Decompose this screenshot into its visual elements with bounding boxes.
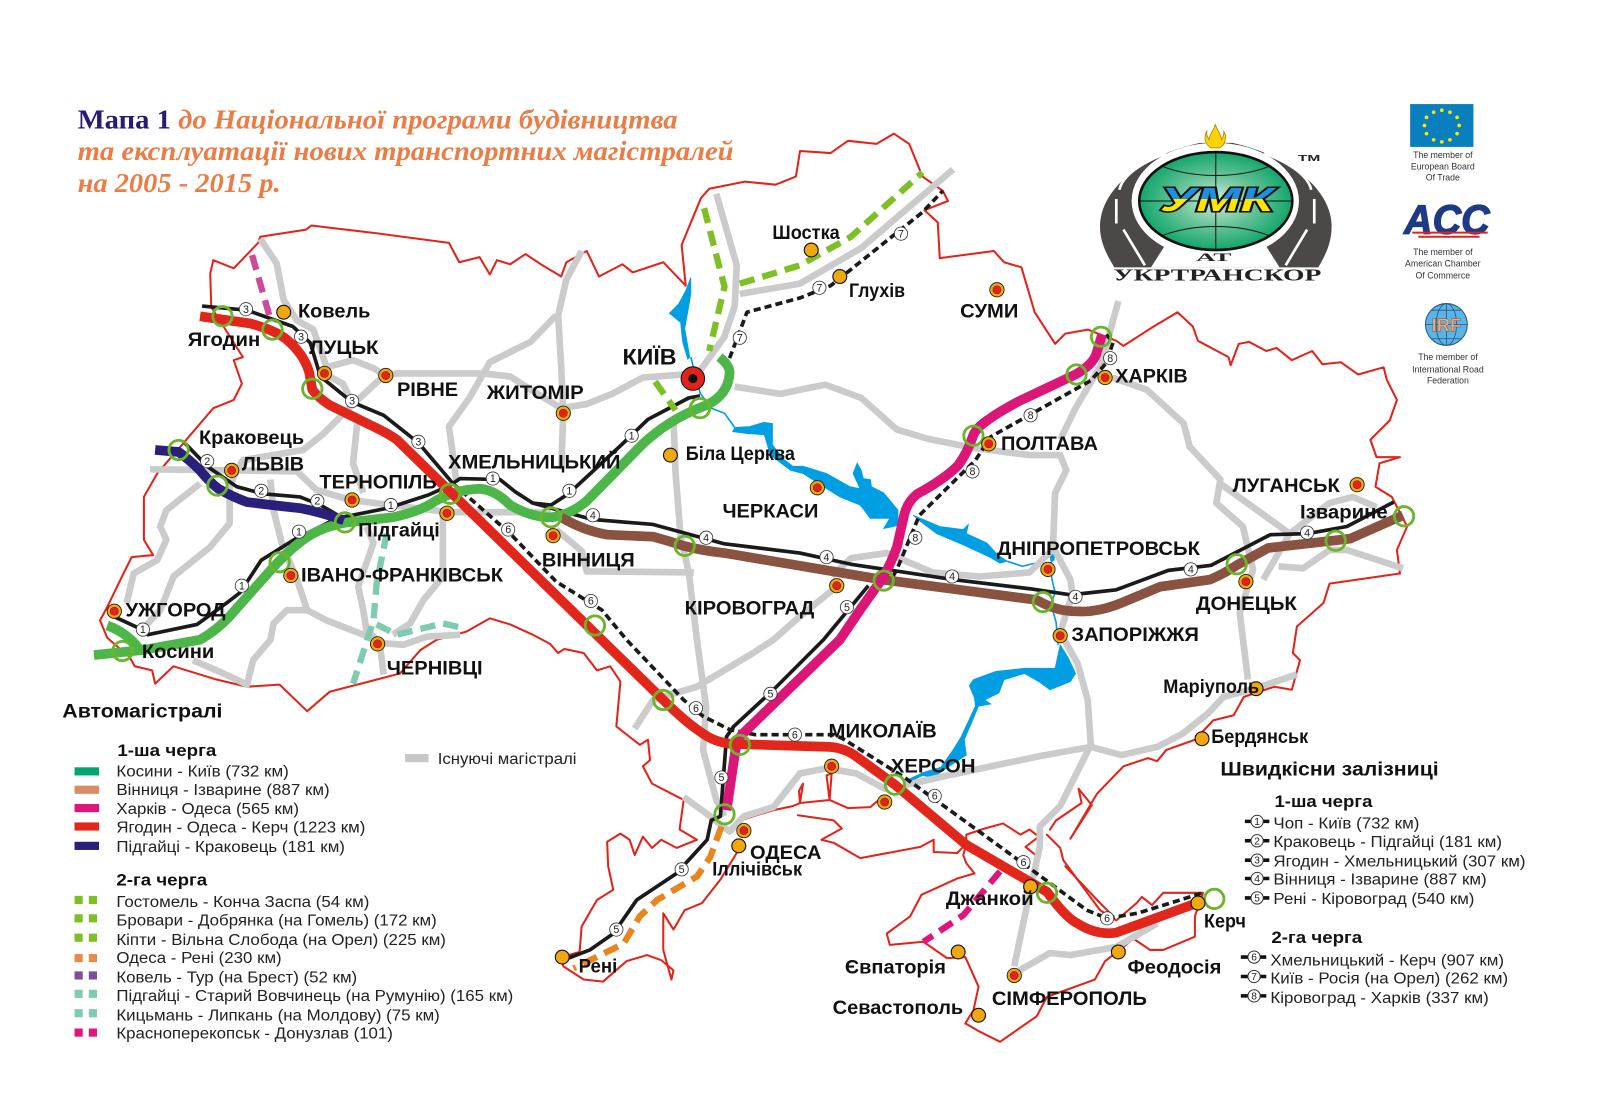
legend group: first stage motorways: 1-ша черга	[117, 741, 217, 760]
legend group: first stage motorways: Ягодин - Одеса - Керч (1223 км)	[116, 820, 365, 837]
logo AT: АТ	[1196, 252, 1233, 264]
city labels: Бердянськ	[1211, 726, 1308, 748]
legend: motorways	[62, 700, 577, 1043]
legend group: second stage railways: 6	[1251, 953, 1257, 964]
rail line number badges: 4	[949, 571, 955, 583]
town markers	[277, 243, 1263, 1022]
city labels: Біла Церква	[686, 443, 795, 465]
rail line number badges: 3	[415, 436, 421, 448]
legend group: second stage motorways: Кицьмань - Липкань (на Молдову) (75 км)	[116, 1007, 440, 1024]
city labels: КИЇВ	[622, 344, 677, 369]
city labels: Краковець	[199, 427, 304, 449]
city labels: СУМИ	[960, 300, 1018, 322]
first-stage highway: Kosyny - Kyiv	[94, 357, 730, 655]
EU flag badge	[1410, 104, 1475, 183]
rail line number badges: 2	[258, 485, 264, 497]
rail line number badges: 1	[629, 430, 635, 442]
logo letters: УМК	[1160, 182, 1277, 219]
city labels: Керч	[1204, 910, 1246, 932]
city labels: Підгайці	[358, 520, 440, 542]
city labels: ЗАПОРІЖЖЯ	[1071, 624, 1199, 646]
legend group: second stage motorways: Бровари - Добрянка (на Гомель) (172 км)	[116, 912, 437, 929]
legend group: first stage railways: Чоп - Київ (732 км)	[1273, 816, 1419, 833]
rail line number badges: 6	[792, 729, 798, 741]
EU flag badge: Of Trade	[1426, 173, 1460, 183]
city labels: Ягодин	[188, 329, 260, 351]
legend group: first stage railways	[1245, 792, 1525, 908]
logo globe	[1139, 152, 1292, 250]
city labels: Шостка	[772, 222, 840, 244]
rail line number badges: 6	[505, 524, 511, 536]
rail line number badges: 6	[1020, 857, 1026, 869]
rail line number badges: 5	[613, 924, 619, 936]
existing highways (grey)	[127, 169, 1403, 970]
rail line number badges: 1	[566, 485, 572, 497]
legend: existing motorways: Існуючі магістралі	[438, 751, 577, 768]
legend group: second stage railways: Кіровоград - Харків (337 км)	[1270, 990, 1489, 1007]
rail line number badges: 5	[844, 602, 850, 614]
EU flag badge: The member of	[1413, 150, 1473, 160]
first-stage highway: Kharkiv - Odesa	[727, 335, 1102, 810]
city labels: Глухів	[849, 280, 905, 302]
rail line number badges: 5	[679, 864, 685, 876]
city labels: Євпаторія	[845, 956, 946, 978]
city labels: ДОНЕЦЬК	[1196, 593, 1297, 615]
logo road dome	[1100, 143, 1332, 267]
city labels	[126, 222, 1388, 1019]
rail line number badges: 6	[588, 596, 594, 608]
city labels: ЖИТОМІР	[486, 382, 584, 404]
rail line number badges: 3	[298, 331, 304, 343]
legend group: second stage railways: Хмельницький - Керч (907 км)	[1270, 952, 1504, 969]
legend group: first stage motorways: Підгайці - Краковець (181 км)	[116, 839, 345, 856]
rail line number badges: 1	[140, 624, 146, 636]
rail line number badges: 1	[490, 473, 496, 485]
rail line number badges: 4	[824, 552, 830, 564]
city labels: Рені	[579, 955, 617, 977]
rail line number badges: 8	[1107, 353, 1113, 365]
IRF globe badge: Federation	[1427, 376, 1469, 386]
city labels: ТЕРНОПІЛЬ	[319, 472, 437, 494]
legend group: second stage railways	[1241, 928, 1508, 1007]
rail line number badges: 7	[737, 332, 743, 344]
legend heading: motorways: Автомагістралі	[62, 700, 222, 722]
city labels: Іллічівськ	[712, 858, 802, 880]
city labels: ДНІПРОПЕТРОВСЬК	[997, 538, 1200, 560]
city labels: Феодосія	[1128, 956, 1221, 978]
ACC badge: The member of	[1413, 247, 1473, 257]
city labels: ХАРКІВ	[1115, 366, 1188, 388]
rail line number badges: 2	[314, 496, 320, 508]
ACC badge: Of Commerce	[1416, 271, 1470, 281]
rail line number badges: 4	[1188, 564, 1194, 576]
city labels: ЛУГАНСЬК	[1233, 475, 1340, 497]
legend group: second stage motorways: Гостомель - Конча Заспа (54 км)	[116, 894, 369, 911]
ACC badge: ACC	[1403, 197, 1490, 243]
rail line number badges: 1	[239, 580, 245, 592]
first-stage highway: Vinnytsia - Izvaryne	[561, 515, 1403, 612]
first-stage highway: Pidhaitsi - Krakovets	[155, 450, 344, 520]
city labels: ЛЬВІВ	[242, 453, 304, 475]
city labels: Ковель	[298, 300, 371, 322]
city labels: ЧЕРНІВЦІ	[387, 657, 483, 679]
city labels: РІВНЕ	[397, 379, 458, 401]
legend group: first stage railways: Краковець - Підгайці (181 км)	[1273, 834, 1502, 851]
rail line number badges: 1	[388, 500, 394, 512]
city labels: Джанкой	[946, 888, 1034, 910]
city labels: ЛУЦЬК	[309, 337, 379, 359]
legend heading: high-speed railways: Швидкісни залізниці	[1220, 758, 1439, 780]
Kyiv capital marker	[681, 367, 705, 390]
rail line number badges: 4	[703, 532, 709, 544]
city labels: ХМЕЛЬНИЦЬКИЙ	[448, 449, 620, 473]
high-speed rail lines (dashed)	[453, 191, 1203, 918]
interchange rings	[113, 307, 1414, 909]
legend group: second stage motorways: Підгайці - Старий Вовчинець (на Румунію) (165 км)	[116, 988, 513, 1005]
logo trademark: TM	[1298, 154, 1321, 163]
legend group: second stage railways: 2-га черга	[1271, 928, 1363, 947]
legend group: second stage motorways: Одеса - Рені (230 км)	[116, 950, 282, 967]
rail line number badges: 1	[296, 526, 302, 538]
rail line number badges: 2	[204, 456, 210, 468]
legend group: second stage railways: Київ - Росія (на Орел) (262 км)	[1270, 971, 1508, 988]
second-stage highways (dashed)	[252, 172, 1000, 968]
rail line number badges: 7	[898, 228, 904, 240]
rail line number badges: 4	[1073, 592, 1079, 604]
oblast-centre markers	[107, 283, 1364, 983]
rail line number badges: 4	[590, 510, 596, 522]
legend: high-speed railways	[1220, 758, 1525, 1007]
legend group: second stage railways: 7	[1251, 972, 1257, 983]
city labels: Маріуполь	[1163, 676, 1259, 698]
ACC badge	[1403, 197, 1490, 281]
city labels: УЖГОРОД	[126, 599, 226, 621]
rail line number badges: 7	[816, 282, 822, 294]
IRF globe badge: IRF	[1432, 315, 1461, 336]
legend group: second stage motorways: 2-га черга	[116, 871, 208, 890]
rail line number badges: 5	[718, 772, 724, 784]
rail line number badges: 8	[1028, 410, 1034, 422]
legend group: first stage railways: Рені - Кіровоград (540 км)	[1273, 891, 1474, 908]
legend group: first stage railways: 3	[1254, 856, 1260, 867]
EU flag badge: European Board	[1411, 161, 1475, 171]
rail line number badges: 8	[969, 466, 975, 478]
legend group: second stage motorways: Ковель - Тур (на Брест) (52 км)	[116, 970, 357, 987]
city labels: ІВАНО-ФРАНКІВСЬК	[301, 565, 503, 587]
rail line number badges: 3	[349, 396, 355, 408]
city labels: ОДЕСА	[750, 842, 821, 864]
city labels: СІМФЕРОПОЛЬ	[992, 988, 1147, 1010]
logo company name: УКРТРАНСКОР	[1113, 266, 1322, 285]
city labels: ПОЛТАВА	[1001, 433, 1098, 455]
rivers and reservoirs	[669, 278, 1075, 784]
rail line number badges: 3	[243, 304, 249, 316]
logo flame	[1205, 124, 1226, 148]
logo: UMK Ukrtranskor	[1100, 124, 1332, 285]
legend group: second stage motorways: Кіпти - Вільна Слобода (на Орел) (225 км)	[116, 932, 446, 949]
city labels: Севастополь	[833, 997, 963, 1019]
legend group: first stage railways: Ягодин - Хмельницький (307 км)	[1273, 853, 1525, 870]
legend group: first stage railways: Вінниця - Ізварине (887 км)	[1273, 872, 1487, 889]
rail line number badges: 6	[693, 703, 699, 715]
rail line number badges: 5	[767, 689, 773, 701]
legend group: first stage railways: 5	[1254, 893, 1260, 904]
legend group: first stage motorways: Вінниця - Ізварине (887 км)	[116, 782, 330, 799]
rail line number badges: 8	[912, 532, 918, 544]
legend group: first stage railways: 2	[1254, 836, 1260, 847]
legend group: first stage motorways	[75, 741, 365, 856]
rail line number badges: 4	[1304, 527, 1310, 539]
rail line number badges: 6	[932, 791, 938, 803]
city labels: ВІННИЦЯ	[542, 549, 635, 571]
legend group: second stage motorways	[75, 871, 513, 1043]
city labels: Ізварине	[1300, 501, 1388, 523]
legend group: first stage railways: 4	[1254, 874, 1260, 885]
first-stage highway: Yahodyn - Odesa - Kerch	[200, 316, 1197, 933]
legend group: second stage railways: 8	[1251, 991, 1257, 1002]
city labels: Косини	[142, 641, 214, 663]
city labels: ХЕРСОН	[891, 755, 976, 777]
IRF globe badge: The member of	[1418, 352, 1478, 362]
legend group: first stage motorways: Косини - Київ (732 км)	[116, 763, 289, 780]
city labels: МИКОЛАЇВ	[829, 720, 937, 743]
IRF globe badge: International Road	[1412, 364, 1484, 374]
legend group: first stage railways: 1	[1254, 817, 1260, 828]
city labels: ЧЕРКАСИ	[722, 500, 818, 522]
legend group: first stage motorways: Харків - Одеса (565 км)	[116, 801, 299, 818]
title: та експлуатації нових транспортних магістралей	[78, 136, 734, 166]
city labels: КІРОВОГРАД	[685, 597, 814, 619]
title	[78, 105, 734, 198]
legend group: first stage railways: 1-ша черга	[1274, 792, 1373, 811]
IRF globe badge	[1412, 304, 1484, 386]
border of Ukraine	[100, 134, 1407, 1042]
ACC badge: American Chamber	[1405, 258, 1481, 268]
title: Мапа 1 до Національної програми будівництва	[78, 105, 678, 135]
legend group: second stage motorways: Красноперекопськ - Донузлав (101)	[116, 1026, 393, 1043]
rail line number badges: 6	[1104, 913, 1110, 925]
rail line number badges	[136, 227, 1314, 936]
high-speed rail lines (solid)	[113, 306, 1394, 960]
title: на 2005 - 2015 р.	[78, 168, 281, 198]
